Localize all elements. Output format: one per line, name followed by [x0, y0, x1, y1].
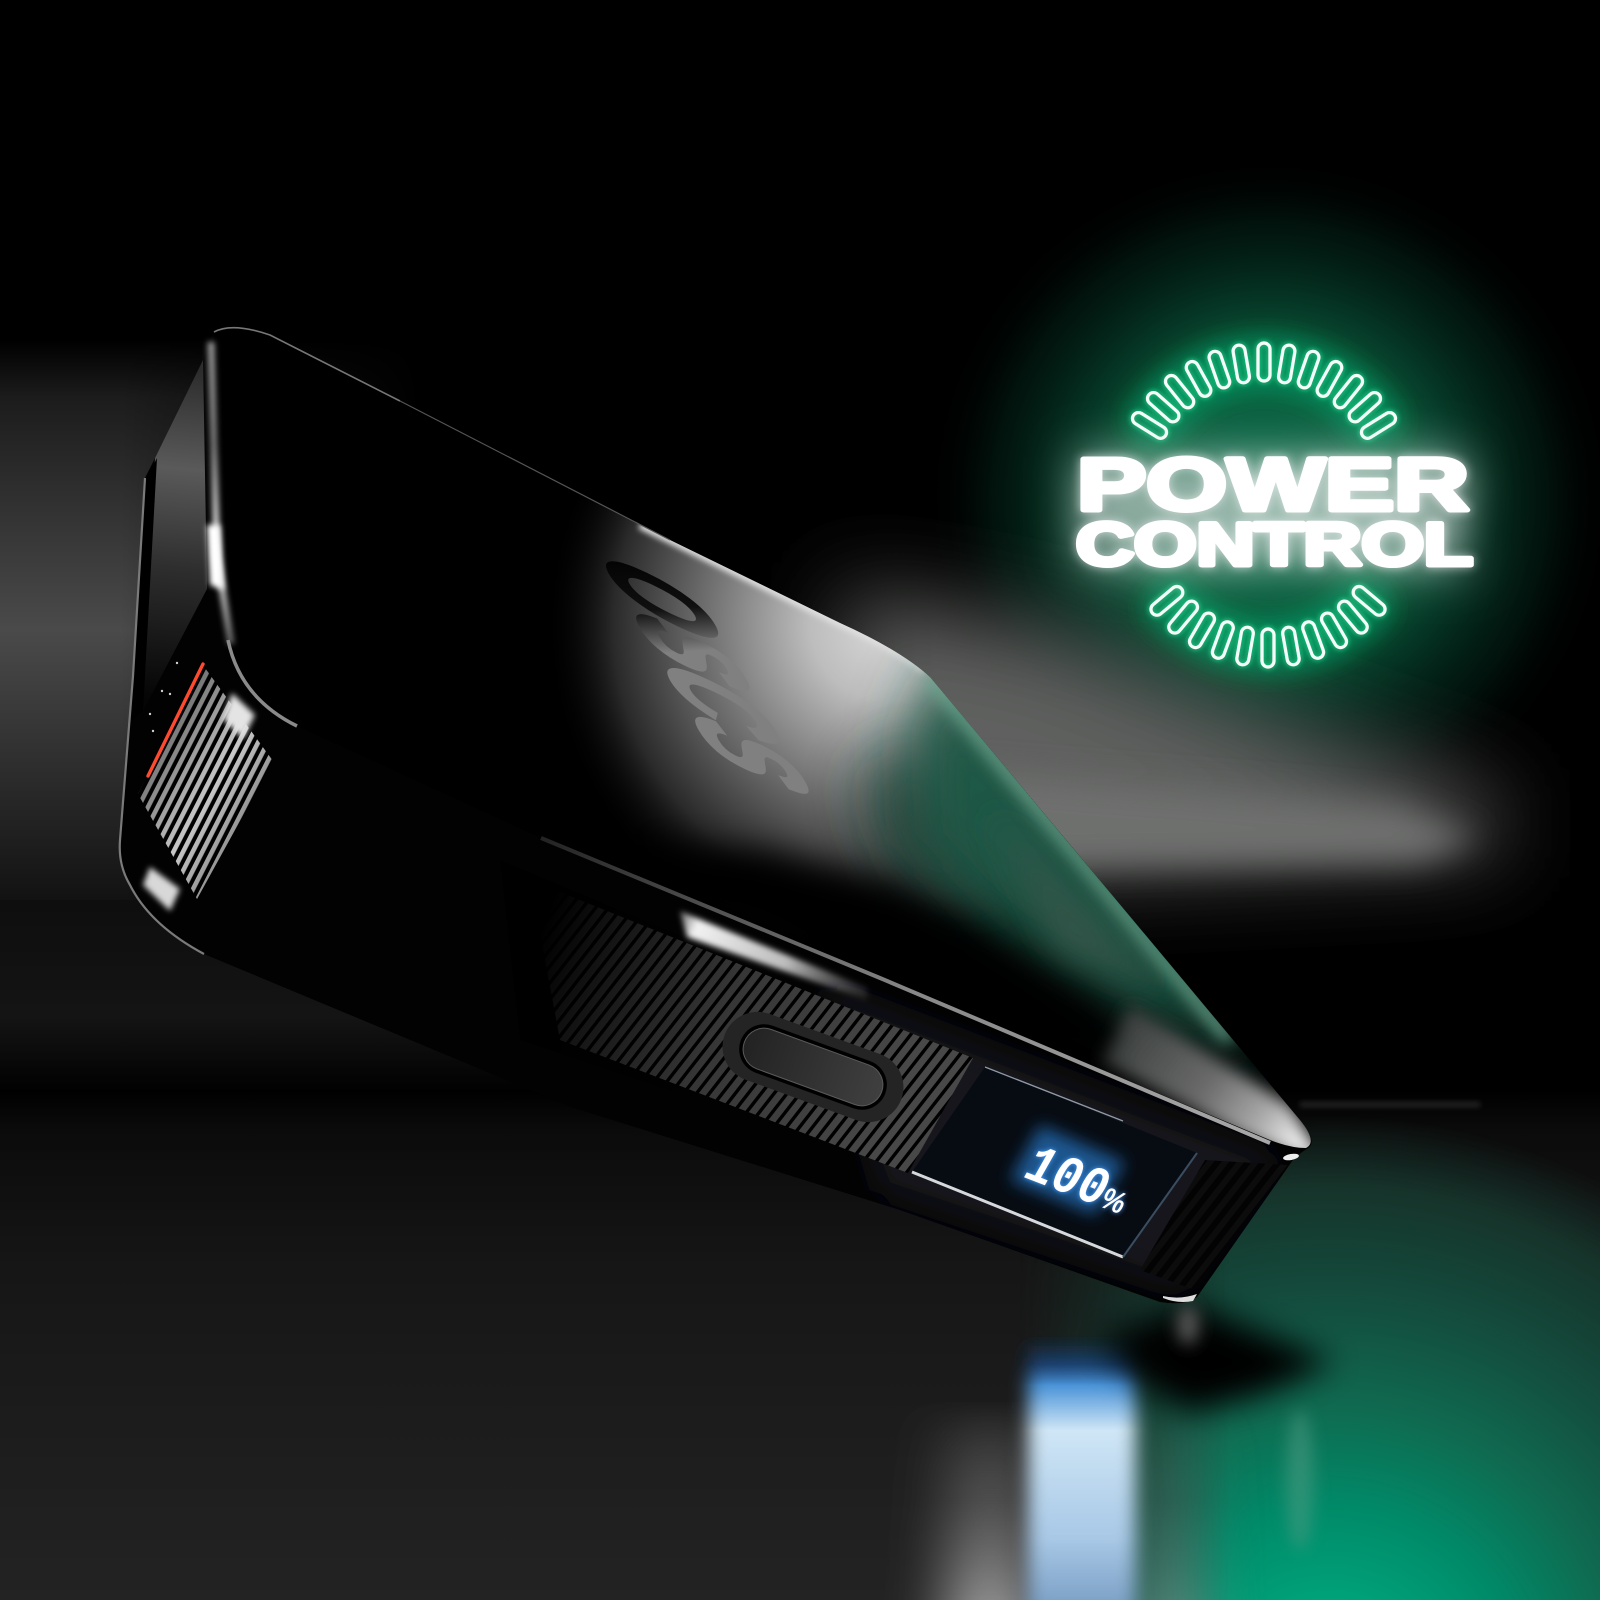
button outline — [732, 1017, 894, 1117]
screen glow — [1010, 1125, 1125, 1215]
battery percentage readout: 100% — [1012, 1137, 1141, 1229]
front highlight streak — [680, 911, 867, 1000]
title line: power: POWER — [1077, 443, 1469, 526]
top edge highlight — [214, 328, 400, 401]
front face soft sheen — [820, 985, 1280, 1290]
upper edge light — [400, 401, 670, 540]
text backlight — [1085, 468, 1465, 558]
screen bottom bevel — [912, 1172, 1123, 1257]
end panel — [143, 360, 207, 711]
embossed brand logo: OSCS — [565, 532, 846, 819]
grey beside reflection — [1135, 1400, 1205, 1600]
tip chrome glint — [1283, 1153, 1299, 1161]
ribbed end grille — [138, 668, 273, 899]
lower tick arc — [1148, 584, 1388, 667]
tip shadow — [1100, 1303, 1335, 1412]
top face — [578, 506, 1311, 1148]
badge title — [1076, 443, 1473, 578]
LCD display — [912, 1067, 1197, 1257]
tip grey light — [1098, 1004, 1311, 1148]
under device band — [0, 900, 700, 1095]
grey floor light — [945, 1400, 1035, 1600]
dark shade above lower edge — [686, 833, 1122, 1060]
power button — [713, 1002, 913, 1132]
green rim light — [930, 677, 1230, 1040]
power bank device — [120, 285, 1340, 1303]
tip reflection glint — [1177, 1305, 1199, 1345]
top edge light — [575, 505, 1048, 910]
port dots — [149, 662, 178, 732]
bottom chrome glint — [1163, 1294, 1197, 1302]
button face — [737, 1022, 889, 1112]
title line: control: CONTROL — [1076, 511, 1473, 578]
green floor reflection — [1064, 1131, 1600, 1600]
green glow behind badge — [925, 155, 1600, 845]
bright horizontal haze core — [960, 770, 1480, 868]
screen right bevel — [1123, 1153, 1197, 1257]
device body silhouette — [120, 327, 1312, 1303]
upper chrome band — [223, 693, 255, 739]
chrome hot spot — [207, 525, 224, 590]
ribbed front grip — [500, 860, 973, 1173]
upper tick arc — [1130, 343, 1398, 441]
left rim light — [120, 478, 204, 954]
glossy upper edge glint — [640, 525, 925, 672]
deep green shade — [834, 716, 957, 886]
button recess — [713, 1002, 913, 1132]
left haze band — [0, 340, 430, 920]
floor — [0, 1090, 1600, 1600]
lighter muted green — [1018, 852, 1141, 982]
thin horizontal light line — [1300, 1103, 1480, 1106]
vertical chrome edge — [211, 342, 231, 644]
chrome corner curve — [228, 640, 297, 726]
lower chrome band — [143, 867, 180, 911]
red LED strip — [148, 664, 203, 776]
diagonal light haze behind device — [840, 590, 1500, 875]
green lit area — [910, 650, 1270, 1060]
reflection green band — [1286, 1410, 1314, 1550]
left dark slot — [132, 458, 157, 720]
left haze fade — [0, 340, 430, 920]
blue screen reflection — [1028, 1335, 1136, 1600]
right end grille — [1140, 1160, 1288, 1290]
screen top glint — [985, 1067, 1123, 1121]
screen panel — [912, 1067, 1197, 1257]
badge: power control — [1076, 343, 1473, 667]
top lip highlight — [541, 838, 1270, 1143]
